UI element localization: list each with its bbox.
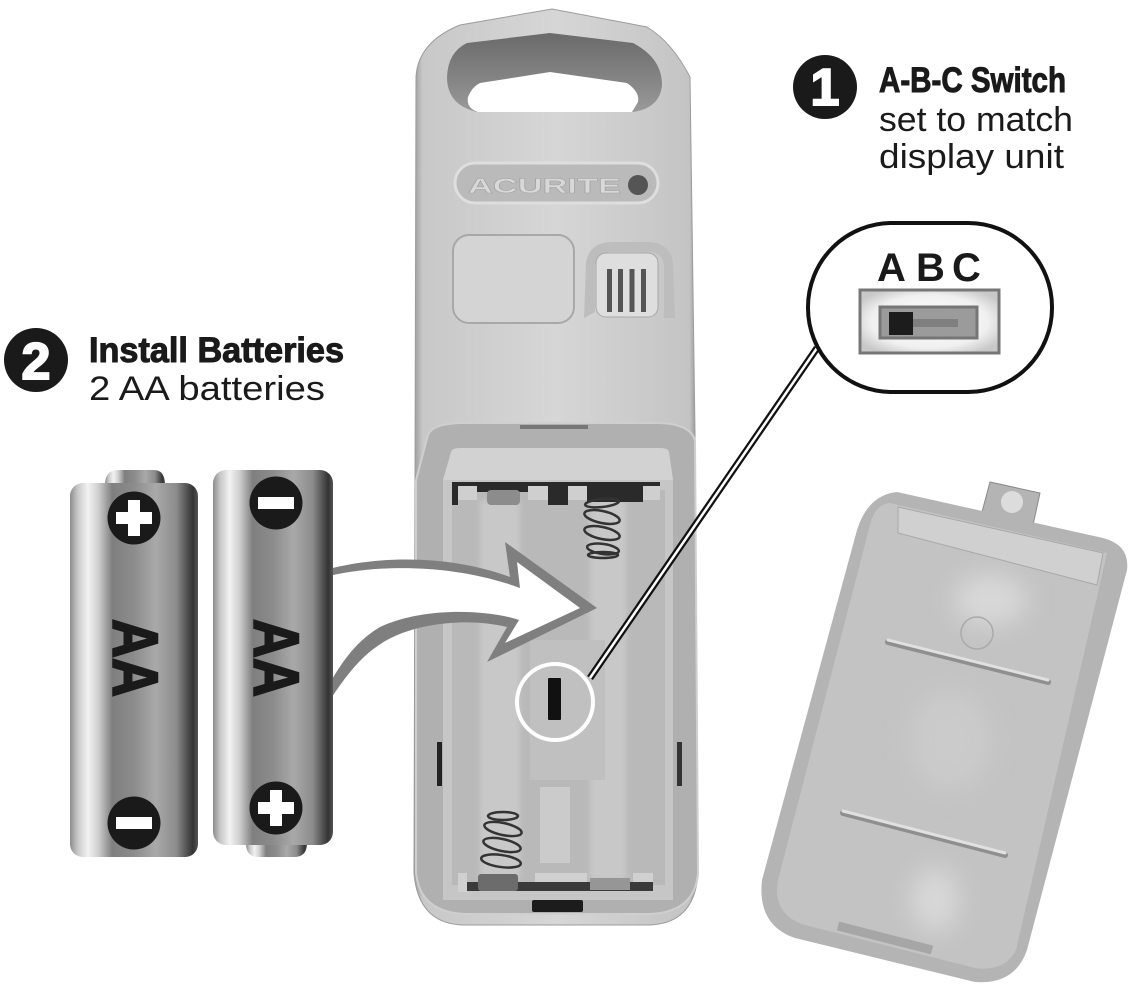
light reflections bbox=[910, 574, 1026, 932]
A B C labels: B bbox=[916, 246, 945, 290]
cell channels bbox=[480, 500, 626, 880]
A B C labels bbox=[877, 246, 981, 290]
bottom contacts bbox=[458, 873, 653, 892]
leader line bbox=[590, 348, 817, 678]
step 2 heading bbox=[4, 328, 344, 408]
A B C labels: A bbox=[877, 246, 906, 290]
arrow into compartment bbox=[325, 542, 597, 708]
spring bottom bbox=[480, 812, 523, 870]
brand badge: ACURITE bbox=[468, 175, 621, 198]
battery compartment bbox=[437, 448, 682, 912]
ribs bbox=[888, 642, 1048, 682]
A B C labels: C bbox=[952, 246, 981, 290]
battery 2 bbox=[213, 470, 333, 857]
spring top bbox=[583, 497, 621, 558]
negative terminal mark bbox=[250, 476, 302, 530]
button bbox=[453, 235, 574, 323]
brand badge bbox=[455, 163, 658, 203]
battery 1 bbox=[70, 470, 198, 857]
step 1 heading: 1 bbox=[811, 59, 839, 117]
slide switch bbox=[860, 290, 999, 353]
step 2 heading: 2 AA batteries bbox=[89, 370, 325, 408]
negative terminal mark bbox=[108, 796, 160, 850]
top contacts bbox=[452, 482, 660, 505]
hanging hole bbox=[447, 33, 662, 112]
vent bbox=[584, 242, 675, 318]
step 1 heading: A-B-C Switch bbox=[879, 61, 1066, 100]
lower casing bbox=[416, 423, 698, 914]
battery cover bbox=[761, 482, 1127, 982]
step 1 heading: set to match bbox=[879, 101, 1073, 139]
step 2 heading: Install Batteries bbox=[89, 331, 344, 370]
positive terminal mark bbox=[250, 782, 302, 834]
battery 1: AA bbox=[99, 619, 171, 697]
hinge tab bbox=[982, 482, 1040, 525]
positive terminal mark bbox=[108, 492, 160, 544]
step 1 heading bbox=[793, 55, 1073, 176]
step 1 heading: display unit bbox=[879, 138, 1065, 176]
step 2 heading: 2 bbox=[22, 333, 50, 391]
switch callout bbox=[808, 223, 1052, 392]
battery 2: AA bbox=[240, 619, 312, 697]
device body bbox=[414, 9, 698, 925]
switch marker circle bbox=[517, 664, 593, 740]
